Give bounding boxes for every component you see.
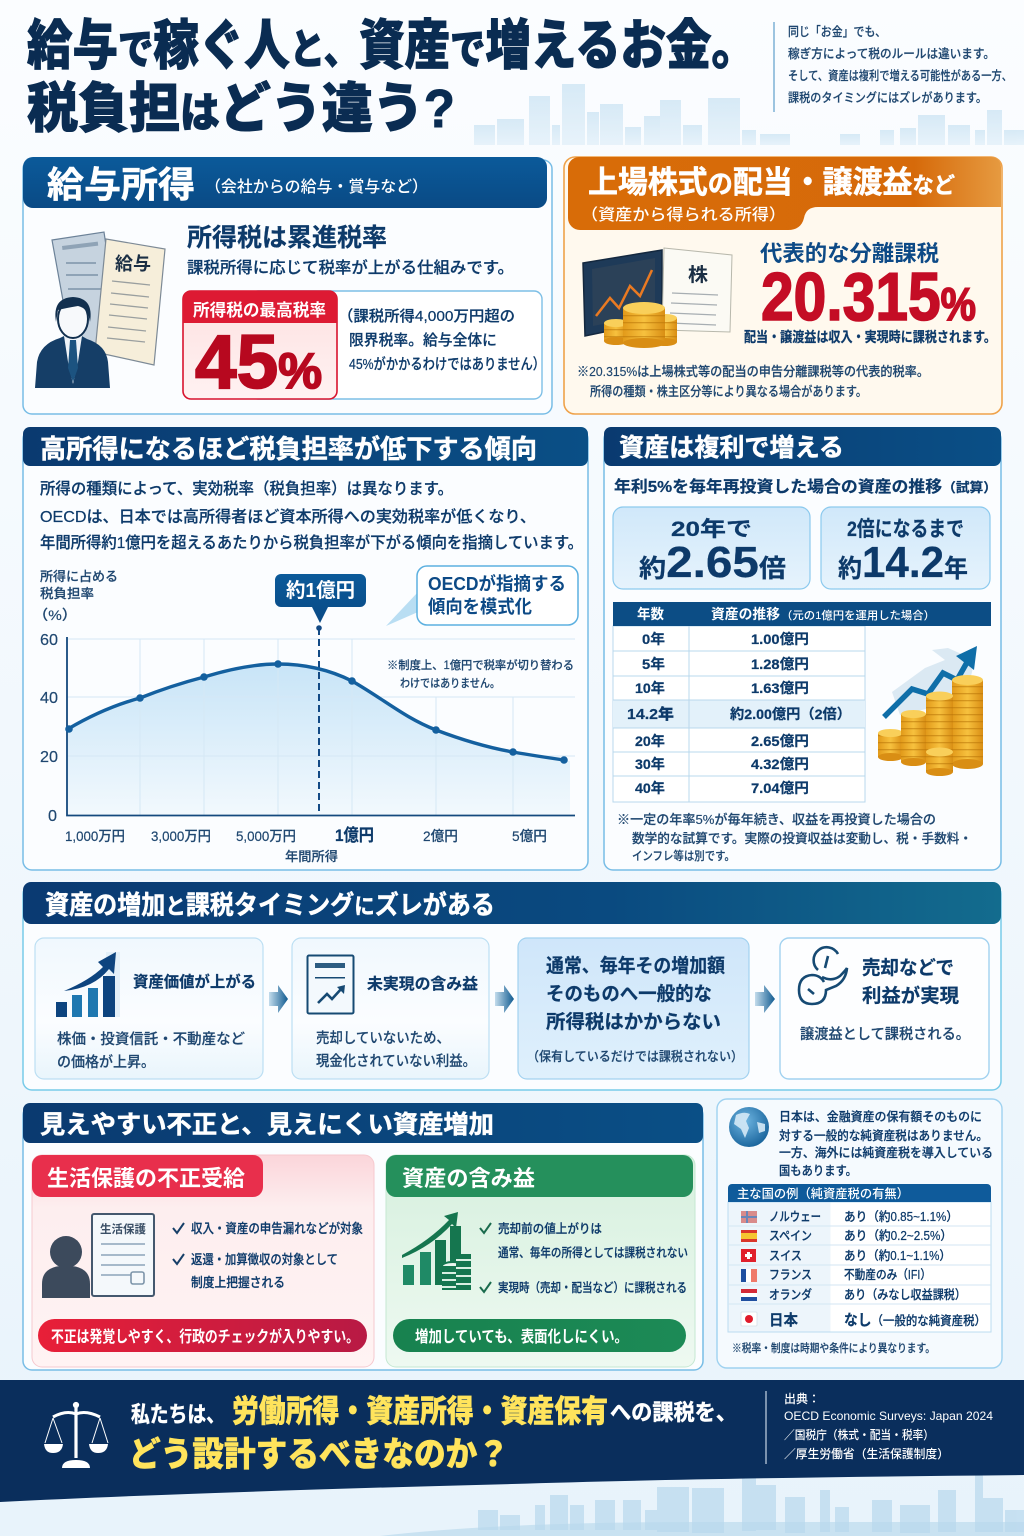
stat card: 20年で約2.65倍: 約2.65 倍 xyxy=(639,538,786,587)
step card: 売却などで利益が実現: 譲渡益として課税される。 xyxy=(800,1026,970,1043)
chart note: わけではありません。 xyxy=(400,677,500,690)
footer banner xyxy=(0,1380,1024,1502)
table rows: 1.00億円 xyxy=(751,631,809,647)
footnote: ※税率・制度は時期や条件により異なります。 xyxy=(732,1341,935,1355)
closing question: どう設計するべきなのか？ xyxy=(129,1436,509,1474)
intro text: 国もあります。 xyxy=(779,1164,857,1178)
y-axis title xyxy=(33,569,118,623)
row: Netherlands: オランダ xyxy=(769,1287,812,1302)
sources: ／厚生労働省（生活保護制度） xyxy=(784,1446,949,1461)
panel: 高所得になるほど税負担率が低下する傾向 xyxy=(23,427,588,870)
bottom skyline xyxy=(380,1470,1024,1536)
icon: green bars, arrow and coins xyxy=(402,1212,471,1290)
subheading: 代表的な分離課税 xyxy=(760,241,939,266)
panel heading xyxy=(23,157,547,208)
panel: 給与所得 xyxy=(23,157,552,414)
sources: OECD Economic Surveys: Japan 2024 xyxy=(784,1409,993,1423)
subheading: 所得税は累進税率 xyxy=(187,224,387,252)
panel heading xyxy=(23,427,588,466)
row: Netherlands xyxy=(741,1287,966,1302)
row: Spain xyxy=(741,1228,952,1243)
x-axis labels: 1億円 xyxy=(335,826,374,845)
panel: 海外の純資産税 xyxy=(717,1099,1002,1368)
callout: OECD xyxy=(386,566,578,626)
table rows: 約2.00億円（2倍） xyxy=(730,706,851,722)
stat card: 2倍になるまで約14.2年 xyxy=(821,507,990,589)
icon: person with document xyxy=(42,1214,154,1298)
chart note: ※制度上、1億円で税率が切り替わる xyxy=(387,658,574,672)
title xyxy=(27,16,757,139)
table header: （元の1億円を運用した場合） xyxy=(781,608,935,622)
y-axis title: 税負担率 xyxy=(40,586,94,601)
title: 税負担はどう違う? xyxy=(27,79,455,139)
body text: 所得の種類によって、実効税率（税負担率）は異なります。 xyxy=(40,480,453,498)
step card: 一般的な所得税はかからない: 通常、毎年その増加額 xyxy=(546,954,725,977)
footnote: インフレ等は別です。 xyxy=(632,848,735,863)
footnote xyxy=(577,364,929,399)
panel heading: 資産は複利で増える xyxy=(619,434,844,462)
icon: bars and arrow xyxy=(56,952,120,1017)
note box xyxy=(250,291,545,399)
note box: （課税所得4,000万円超の xyxy=(338,308,515,325)
row: Japan: なし（一般的な純資産税） xyxy=(844,1312,986,1329)
callout: top tax rate 45% xyxy=(183,291,337,405)
closing question: 私たちは、 xyxy=(131,1402,225,1427)
panel heading: 上場株式の配当・譲渡益など xyxy=(588,165,955,200)
row: France: 不動産のみ（IFI） xyxy=(844,1267,931,1282)
icon: stock chart, document and coins: 株 xyxy=(688,264,708,286)
sources: ／国税庁（株式・配当・税率） xyxy=(784,1427,934,1442)
table header: 主な国の例（純資産税の有無） xyxy=(737,1186,909,1201)
big number: 20.315%: 20.315% xyxy=(761,259,976,335)
body text: 年間所得約1億円を超えるあたりから税負担率が下がる傾向を指摘しています。 xyxy=(40,533,583,552)
stat card: 2倍になるまで約14.2年: 2倍になるまで xyxy=(847,518,964,541)
stat card: 20年で約2.65倍: 20年で xyxy=(671,518,752,541)
intro text xyxy=(779,1109,993,1178)
checklist: 収入・資産の申告漏れなどが対象 xyxy=(191,1221,363,1236)
arrow xyxy=(755,985,775,1013)
footnote: 数学的な試算です。実際の投資収益は変動し、税・手数料・ xyxy=(632,831,972,846)
step card: 資産価値が上がる: 株価・投資信託・不動産など xyxy=(57,1031,245,1048)
row: France: フランス xyxy=(769,1268,812,1282)
closing question: 労働所得・資産所得・資産保有 xyxy=(232,1394,608,1429)
checklist: 通常、毎年の所得としては課税されない xyxy=(498,1245,688,1260)
row: Japan xyxy=(741,1312,986,1329)
description: 課税所得に応じて税率が上がる仕組みです。 xyxy=(187,258,514,277)
icon: person with document: 生活保護 xyxy=(100,1222,146,1236)
chart note xyxy=(387,658,574,690)
subtitle: 年利5%を毎年再投資した場合の資産の推移 （試算） xyxy=(614,477,997,496)
takeaway pill: 増加していても、表面化しにくい。 xyxy=(415,1327,628,1346)
icon: balance scale xyxy=(44,1402,108,1468)
step card: 未実現の含み益: 現金化されていない利益。 xyxy=(316,1053,476,1070)
footnote: ※一定の年率5%が毎年続き、収益を再投資した場合の xyxy=(617,812,936,827)
table rows: 20年 xyxy=(635,733,665,749)
step card: 資産価値が上がる: の価格が上昇。 xyxy=(57,1053,155,1071)
top skyline xyxy=(474,84,1024,145)
icon: documents and businessperson xyxy=(35,232,165,388)
x-axis labels: 3,000万円 xyxy=(151,828,211,844)
x-axis labels xyxy=(65,826,547,845)
intro text: 同じ「お金」でも、 xyxy=(788,24,886,39)
step card: 売却などで利益が実現: 利益が実現 xyxy=(862,984,959,1007)
axes xyxy=(67,637,575,816)
stat card: 20年で約2.65倍 xyxy=(613,507,810,589)
icon: document with chart xyxy=(308,956,354,1014)
row: Netherlands: あり（みなし収益課税） xyxy=(844,1288,966,1302)
step card: 未実現の含み益: 売却していないため、 xyxy=(316,1030,450,1047)
body text xyxy=(40,480,583,552)
panel heading: 高所得になるほど税負担率が低下する傾向 xyxy=(40,434,537,464)
icon: stock chart, document and coins xyxy=(583,248,732,348)
data line xyxy=(68,664,564,760)
panel heading xyxy=(568,157,1001,230)
table rows: 14.2年 xyxy=(627,705,674,723)
x-axis labels: 2億円 xyxy=(423,828,458,844)
body text: OECDは、日本では高所得者ほど資本所得への実効税率が低くなり、 xyxy=(40,507,536,526)
sources: 出典： xyxy=(784,1392,820,1406)
intro text: 稼ぎ方によって税のルールは違います。 xyxy=(788,46,995,61)
y-axis title: （%） xyxy=(33,607,77,623)
footnote: 所得の種類・株主区分等により異なる場合があります。 xyxy=(590,384,867,399)
step card: 一般的な所得税はかからない: そのものへ一般的な xyxy=(546,983,712,1005)
closing question xyxy=(129,1394,737,1474)
arrow xyxy=(495,985,514,1013)
panel: 資産は複利で増える xyxy=(604,427,1001,870)
icon: globe xyxy=(729,1107,769,1147)
step card: 未実現の含み益 xyxy=(292,938,489,1079)
table rows: 4.32億円 xyxy=(751,756,809,772)
x-axis labels: 5億円 xyxy=(512,828,547,844)
table: asset growth xyxy=(613,602,991,802)
callout: OECD: 傾向を模式化 xyxy=(428,597,532,617)
y-axis labels: 60 xyxy=(40,632,58,649)
card heading: 資産の含み益 xyxy=(402,1166,535,1191)
panel heading: 資産の増加と課税タイミングにズレがある xyxy=(45,890,495,920)
marker label: 約1億円 xyxy=(275,574,366,623)
icon: rising arrow and coin stacks xyxy=(878,646,983,776)
closing question: への課税を、 xyxy=(610,1400,737,1425)
intro text xyxy=(774,22,1012,112)
panel heading xyxy=(23,882,1001,924)
takeaway pill: 不正は発覚しやすく、行政のチェックが入りやすい。 xyxy=(51,1327,359,1346)
row: Norway: ノルウェー xyxy=(769,1210,821,1224)
data points xyxy=(65,660,568,764)
y-axis labels: 40 xyxy=(40,690,58,707)
panel: 上場株式の配当・譲渡益 xyxy=(564,157,1002,414)
panel: 見えやすい不正と、見えにくい資産増加 xyxy=(23,1103,703,1370)
note box: 限界税率。給与全体に xyxy=(349,332,497,349)
intro text: 日本は、金融資産の保有額そのものに xyxy=(779,1109,982,1124)
row: Switzerland: スイス xyxy=(769,1249,802,1263)
table header xyxy=(728,1184,991,1202)
row: Norway: あり（約0.85~1.1%） xyxy=(844,1209,958,1224)
icon: hand and coin xyxy=(799,947,847,1004)
table rows: 0年 xyxy=(642,631,665,647)
step card: 資産価値が上がる xyxy=(35,938,263,1079)
x-axis labels: 1,000万円 xyxy=(65,828,125,844)
intro text: 対する一般的な純資産税はありません。 xyxy=(779,1128,988,1143)
panel heading: 見えやすい不正と、見えにくい資産増加 xyxy=(40,1111,494,1139)
1億円 marker line xyxy=(316,625,322,815)
table header: 資産の推移 xyxy=(711,606,780,622)
takeaway pill xyxy=(393,1319,686,1352)
card: 生活保護の不正受給 xyxy=(32,1155,374,1367)
checklist: 制度上把握される xyxy=(191,1275,285,1290)
stat card: 2倍になるまで約14.2年: 約14.2年 xyxy=(838,538,968,587)
step card: 一般的な所得税はかからない: 所得税はかからない xyxy=(546,1011,721,1033)
row: Switzerland: あり（約0.1~1.1%） xyxy=(844,1248,951,1263)
footnote xyxy=(617,812,972,863)
arrow xyxy=(269,985,288,1013)
sources xyxy=(766,1391,993,1464)
checklist xyxy=(480,1221,688,1295)
y-axis labels: 20 xyxy=(40,749,58,766)
table rows: 40年 xyxy=(635,780,665,796)
footnote: ※20.315%は上場株式等の配当の申告分離課税等の代表的税率。 xyxy=(577,364,929,379)
card heading xyxy=(386,1155,693,1197)
card heading xyxy=(32,1155,263,1197)
table rows xyxy=(627,631,851,796)
callout: OECD: OECDが指摘する xyxy=(428,573,566,594)
panel heading xyxy=(23,1103,703,1143)
table header: 年数 xyxy=(637,606,664,622)
step card: 売却などで利益が実現: 売却などで xyxy=(862,957,954,979)
panel: 資産の増加と課税タイミングにズレがある xyxy=(23,882,1001,1090)
intro text: 一方、海外には純資産税を導入している xyxy=(779,1145,993,1160)
marker label: 約1億円: 約1億円 xyxy=(286,579,355,602)
card: 資産の含み益 xyxy=(386,1155,695,1367)
table rows: 1.28億円 xyxy=(751,656,809,672)
panel heading: （資産から得られる所得） xyxy=(581,206,786,224)
step card: 売却などで利益が実現 xyxy=(780,938,989,1079)
x-axis title: 年間所得 xyxy=(285,849,338,864)
checklist: 返還・加算徴収の対象として xyxy=(191,1252,338,1267)
panel heading xyxy=(604,427,1001,466)
panel heading: （会社からの給与・賞与など） xyxy=(205,178,428,196)
chart area fill xyxy=(68,664,570,815)
step card: 未実現の含み益: 未実現の含み益 xyxy=(367,974,478,993)
table rows: 10年 xyxy=(635,680,665,696)
step card: 資産価値が上がる: 資産価値が上がる xyxy=(133,972,256,991)
card heading: 生活保護の不正受給 xyxy=(47,1166,245,1191)
icon: documents and businessperson: 給与 xyxy=(115,254,151,274)
y-axis title: 所得に占める xyxy=(40,569,118,584)
table: countries xyxy=(728,1184,991,1332)
takeaway pill xyxy=(38,1319,367,1352)
note box: 45%がかかるわけではありません） xyxy=(349,355,545,373)
step card: 一般的な所得税はかからない xyxy=(518,938,749,1079)
row: Spain: あり（約0.2~2.5%） xyxy=(844,1228,952,1243)
checklist xyxy=(173,1221,363,1290)
table header xyxy=(613,602,991,626)
panel heading: 給与所得 xyxy=(47,164,195,205)
table rows: 1.63億円 xyxy=(751,680,809,696)
line chart xyxy=(33,566,578,864)
step card: 一般的な所得税はかからない: （保有しているだけでは課税されない） xyxy=(527,1049,743,1064)
checklist: 売却前の値上がりは xyxy=(498,1221,602,1236)
row: Japan: 日本 xyxy=(769,1312,798,1329)
table rows: 7.04億円 xyxy=(751,780,809,796)
y-axis labels: 0 xyxy=(48,808,57,825)
table rows: 5年 xyxy=(642,656,665,672)
intro text: 課税のタイミングにはズレがあります。 xyxy=(788,90,987,105)
title: 給与で稼ぐ人と、資産で増えるお金。 xyxy=(27,16,757,76)
callout: top tax rate 45%: 所得税の最高税率 xyxy=(193,300,326,320)
y-axis labels xyxy=(40,632,58,825)
row: Norway xyxy=(741,1209,958,1224)
table rows: 30年 xyxy=(635,756,665,772)
table rows: 2.65億円 xyxy=(751,733,809,749)
callout: top tax rate 45%: 45% xyxy=(195,320,322,405)
row: Switzerland xyxy=(741,1248,951,1263)
checklist: 実現時（売却・配当など）に課税される xyxy=(498,1280,687,1295)
row: Spain: スペイン xyxy=(769,1229,812,1243)
row: France xyxy=(741,1267,931,1282)
x-axis labels: 5,000万円 xyxy=(236,828,296,844)
